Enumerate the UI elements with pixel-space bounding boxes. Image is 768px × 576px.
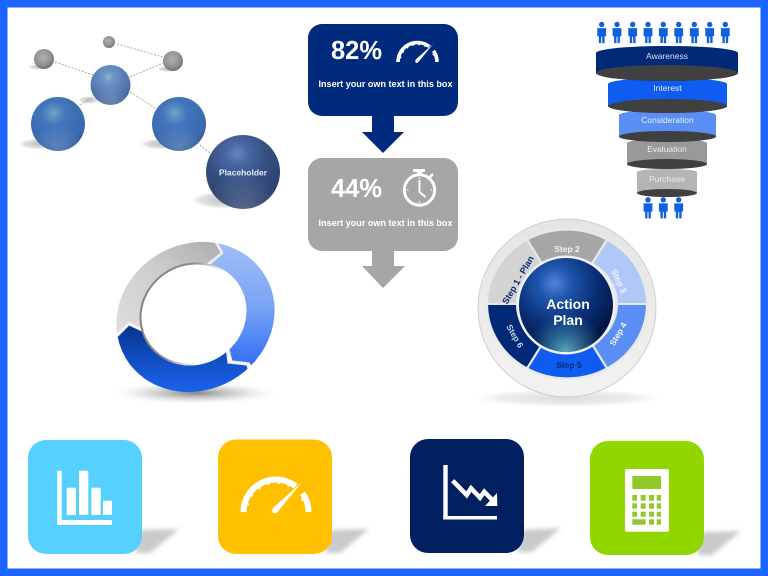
placeholder label: Placeholder [219, 168, 268, 178]
panel: sphere network [18, 36, 280, 209]
funnel tier: awareness [596, 46, 738, 81]
ring shadow [113, 382, 277, 404]
navy box caption: Insert your own text in this box [318, 79, 453, 90]
left blue sphere [18, 97, 85, 151]
funnel tier: consideration: Consideration [641, 115, 694, 125]
funnel tier: purchase [637, 169, 697, 197]
funnel tier: purchase: Purchase [649, 174, 685, 184]
funnel tier: awareness: Awareness [646, 51, 688, 61]
people row below funnel [644, 197, 683, 218]
funnel tier: interest [608, 78, 727, 113]
step labels: Step 1 - Plan [500, 254, 536, 306]
ring arrow: dark blue [118, 324, 248, 392]
placeholder sphere [190, 135, 280, 209]
icon tile: calculator [590, 441, 741, 555]
gray sphere left [28, 49, 54, 70]
step labels: Step 5 [556, 360, 582, 370]
gray box and arrow shape [308, 158, 458, 288]
icon tile: bar chart [28, 440, 179, 554]
44% value: 44% [331, 175, 382, 203]
step labels [500, 244, 629, 370]
82% value: 82% [331, 37, 382, 65]
dotted connector lines [55, 44, 210, 153]
navy box and arrow shape [308, 24, 458, 153]
gray box caption: Insert your own text in this box [318, 218, 453, 229]
panel: gray 44% box with arrow [308, 158, 458, 288]
icon: stopwatch [404, 169, 435, 205]
ring hole with inner bevel [122, 244, 264, 384]
right blue sphere [140, 97, 206, 151]
funnel tier: evaluation: Evaluation [647, 144, 687, 154]
center sphere with action plan label: Action [546, 296, 590, 312]
middle blue sphere [90, 65, 130, 105]
step labels: Step 3 [609, 267, 629, 295]
shadow of middle sphere [78, 96, 100, 104]
funnel tier: evaluation [627, 139, 707, 169]
panel: action plan wheel [471, 219, 663, 407]
center sphere with action plan label: Plan [553, 312, 583, 328]
step labels: Step 4 [607, 320, 629, 348]
icon tile: speedometer [218, 440, 369, 554]
icon tile: declining chart [410, 439, 561, 553]
center sphere with action plan label [516, 256, 616, 354]
funnel tier: consideration [619, 110, 716, 142]
ring arrow: gray [116, 242, 222, 334]
step labels: Step 6 [504, 322, 526, 350]
panel: navy 82% box with arrow [308, 24, 458, 153]
ring arrow: light blue [210, 243, 275, 366]
panel: circular arrows ring [116, 242, 275, 402]
panel: marketing funnel [596, 22, 738, 218]
ring arrows clipped to outer ellipse [116, 242, 275, 392]
gray sphere right [157, 51, 183, 72]
wheel shadow [471, 389, 663, 407]
outer disc [478, 219, 656, 397]
wheel segments [487, 230, 647, 378]
funnel tier: interest: Interest [653, 83, 682, 93]
people row above funnel [597, 22, 730, 43]
icon: speedometer [398, 43, 437, 63]
small gray sphere top [103, 36, 115, 48]
step labels: Step 2 [554, 244, 580, 254]
